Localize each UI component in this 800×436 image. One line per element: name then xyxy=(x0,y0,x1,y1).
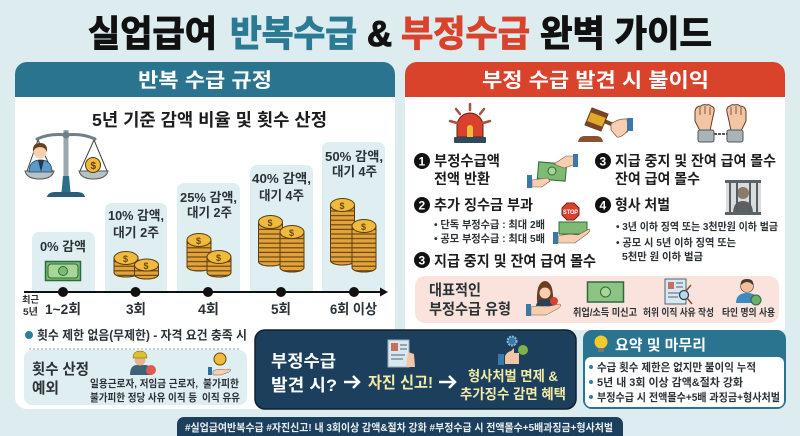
column: 3 times: 대기 2주 xyxy=(113,225,159,240)
item 2: additional penalty: • 단독 부정수급 : 최대 2배 xyxy=(434,218,545,231)
icon: thumbs up with gear xyxy=(498,336,528,365)
item 3 right: payment suspended xyxy=(595,153,776,188)
icon: money changing hands xyxy=(527,154,578,188)
icon: woman with hand xyxy=(526,281,561,316)
icon: coin stacks: $ xyxy=(144,261,149,271)
icon: stop sign and hand xyxy=(553,203,590,244)
title: & xyxy=(367,13,392,54)
icon: coin stacks xyxy=(114,252,158,279)
column: 4 times: 25% 감액, xyxy=(180,190,237,205)
panel header: repeat benefit rules: 반복 수급 규정 xyxy=(138,69,272,92)
item 3 right: payment suspended: 지급 중지 및 잔여 급여 몰수 xyxy=(615,153,776,170)
icon: coin stacks: $ xyxy=(216,253,221,263)
title: 실업급여 xyxy=(88,13,217,54)
note: no limit on count: 횟수 제한 없음(무제한) - 자격 요건 충족 시 xyxy=(37,328,247,342)
column: 5 times: 대기 4주 xyxy=(259,188,304,203)
panel: typical fraud types: 허위 이직 사유 작성 xyxy=(643,306,714,319)
icon: false document xyxy=(665,279,692,304)
icon: stop sign and hand: STOP xyxy=(563,210,578,216)
column: 4 times xyxy=(177,183,240,291)
item 3 right: payment suspended: 3 xyxy=(600,154,606,168)
panel: summary: 수급 횟수 제한은 없지만 불이익 누적 xyxy=(597,360,756,374)
icon: coin stacks: $ xyxy=(196,236,201,246)
icon: coin stacks: $ xyxy=(123,254,128,264)
panel: typical fraud types xyxy=(415,276,779,323)
callout: voluntary report: 발견 시? xyxy=(271,376,337,395)
panel: fraud disadvantages xyxy=(405,62,785,330)
timeline: 3회 xyxy=(126,301,146,317)
item 1: full repayment: 1 xyxy=(418,154,426,168)
item 4: criminal punishment: 형사 처벌 xyxy=(615,197,670,214)
icon: banknote xyxy=(588,282,624,302)
timeline: 5회 xyxy=(271,301,291,317)
timeline: 최근 xyxy=(22,294,39,306)
icon: another person identity xyxy=(736,279,761,305)
column: 1-2 times: 0% 감액 xyxy=(40,239,86,254)
column: 4 times: 대기 2주 xyxy=(187,205,232,220)
item 2: additional penalty: 추가 징수금 부과 xyxy=(434,197,533,214)
arrow xyxy=(439,376,455,388)
callout: voluntary report: 부정수급 xyxy=(271,352,336,371)
icon: scale with person and coin xyxy=(25,130,108,197)
icon: coin stacks: $ xyxy=(340,201,345,211)
column: 1-2 times xyxy=(32,232,95,291)
icon: banknote xyxy=(46,262,80,280)
panel: count exceptions: 불가피한 xyxy=(203,377,239,390)
timeline: 1~2회 xyxy=(45,301,81,317)
icon: coin stacks xyxy=(330,198,376,272)
panel: typical fraud types: 취업/소득 미신고 xyxy=(573,306,637,319)
item 3 right: payment suspended: 잔여 급여 몰수 xyxy=(615,171,700,188)
panel: typical fraud types: 타인 명의 사용 xyxy=(722,306,775,319)
callout: voluntary report xyxy=(255,330,576,409)
panel: count exceptions xyxy=(24,350,247,405)
panel: summary: 5년 내 3회 이상 감액&절차 강화 xyxy=(597,375,743,389)
arrow xyxy=(344,376,359,388)
timeline: 6회 이상 xyxy=(330,301,377,317)
item 4: criminal punishment xyxy=(595,180,778,263)
icon: construction worker xyxy=(130,351,156,375)
panel header: fraud disadvantages: 부정 수급 발견 시 불이익 xyxy=(482,69,709,92)
item 4: criminal punishment: 5천만 원 이하 벌금 xyxy=(622,250,703,263)
panel: typical fraud types: 대표적인 xyxy=(429,282,481,299)
icon: hand with coin xyxy=(208,353,231,375)
column: 6 or more times xyxy=(322,142,385,291)
panel: count exceptions: 불가피한 정당 사유 이직 등 xyxy=(90,391,197,404)
icon: light bulb xyxy=(594,336,608,352)
icon: jail bars xyxy=(725,180,761,215)
icon: coin stacks xyxy=(187,234,231,277)
icon: coin stacks: $ xyxy=(361,222,366,232)
icon: siren xyxy=(450,104,490,143)
panel: summary xyxy=(583,330,786,409)
panel: summary: 요약 및 마무리 xyxy=(615,337,706,354)
hashtag bar: #실업급여반복수급 #자진신고! 내 3회이상 감액&절차 강화 #부정수급 시 전액몰수+5배과징금+형사처벌 xyxy=(185,421,613,434)
item 1: full repayment: 부정수급액 xyxy=(434,153,500,170)
panel: count exceptions: 일용근로자, 저임금 근로자, xyxy=(90,377,198,390)
panel: typical fraud types: 부정수급 유형 xyxy=(429,301,511,318)
subheading: 5년 기준 감액 비율 및 횟수 산정 xyxy=(92,110,327,130)
panel: count exceptions: 예외 xyxy=(32,380,59,397)
title: 부정수급 xyxy=(401,13,530,54)
title xyxy=(88,13,712,54)
panel: summary: 부정수급 시 전액몰수+5배 과징금+형사처벌 xyxy=(597,390,780,404)
panel: repeat benefit rules xyxy=(15,62,395,409)
column: 5 times xyxy=(250,165,313,291)
column: 3 times: 10% 감액, xyxy=(108,208,164,223)
timeline: 4회 xyxy=(198,301,219,317)
title: 반복수급 xyxy=(230,13,357,54)
item 1: full repayment: 전액 반환 xyxy=(434,171,490,188)
icon: coin stacks: $ xyxy=(268,218,273,228)
column: 6 or more times: 대기 4주 xyxy=(332,164,377,179)
item 2: additional penalty xyxy=(414,197,590,245)
panel header: repeat benefit rules xyxy=(15,62,395,97)
icon: scale with person and coin: $ xyxy=(90,161,96,172)
icon: coin stacks: $ xyxy=(289,228,294,238)
panel: count exceptions: 횟수 산정 xyxy=(32,361,89,378)
icon: handcuffed fists xyxy=(695,105,746,142)
column: 3 times xyxy=(105,203,167,291)
column: 6 or more times: 50% 감액, xyxy=(325,149,383,164)
title: 완벽 가이드 xyxy=(540,13,712,54)
panel header: fraud disadvantages xyxy=(405,62,785,97)
item 2: additional penalty: 2 xyxy=(418,198,426,212)
item 3 left: payment suspended: 3 xyxy=(418,254,426,268)
timeline xyxy=(22,287,388,318)
item 2: additional penalty: • 공모 부정수급 : 최대 5배 xyxy=(434,232,545,245)
item 1: full repayment xyxy=(414,153,578,188)
callout: voluntary report: 형사처벌 면제 & xyxy=(468,368,558,384)
item 4: criminal punishment: • 3년 이하 징역 또는 3천만원 이하 벌금 xyxy=(616,220,778,233)
icon: coin stacks xyxy=(258,216,304,272)
callout: voluntary report: 자진 신고! xyxy=(368,374,433,392)
icon: document in hand xyxy=(388,340,415,367)
hashtag bar xyxy=(177,417,623,436)
callout: voluntary report: 추가징수 감면 혜택 xyxy=(460,386,566,402)
item 4: criminal punishment: 4 xyxy=(600,198,606,212)
item 3 left: payment suspended: 지급 중지 및 잔여 급여 몰수 xyxy=(434,253,596,270)
icon: gavel xyxy=(578,108,633,142)
panel: count exceptions: 이직 유유 xyxy=(202,391,240,404)
item 4: criminal punishment: • 공모 시 5년 이하 징역 또는 xyxy=(616,236,736,249)
column: 5 times: 40% 감액, xyxy=(252,171,311,186)
timeline: 5년 xyxy=(23,306,38,318)
